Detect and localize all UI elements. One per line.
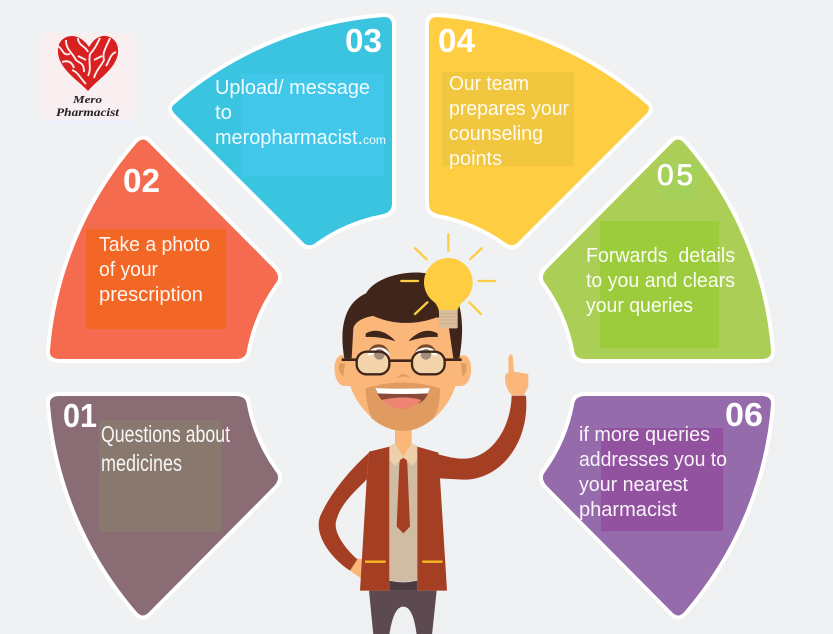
text 05 bbox=[586, 245, 735, 317]
raised arm bbox=[437, 396, 526, 480]
logo: Mero Pharmacist bbox=[42, 33, 133, 125]
text 01 bbox=[101, 421, 230, 476]
logo text: Mero bbox=[72, 94, 103, 106]
text 06: pharmacist bbox=[579, 499, 677, 521]
character: pharmacist with light bulb bbox=[319, 234, 528, 634]
trousers bbox=[369, 591, 437, 634]
text 03: to bbox=[215, 102, 232, 124]
text 06: addresses you to bbox=[579, 449, 727, 471]
panel 04: Our team bbox=[427, 15, 651, 247]
text 01: medicines bbox=[101, 450, 182, 476]
number 02: 02 bbox=[123, 162, 160, 199]
icon: red heart bbox=[58, 36, 118, 91]
number 04: 04 bbox=[438, 22, 476, 59]
text 03: com bbox=[363, 133, 386, 147]
text 05: to you and clears bbox=[586, 270, 735, 292]
text 02: Take a photo bbox=[99, 234, 210, 256]
text 02 bbox=[99, 234, 210, 306]
text 04: points bbox=[449, 148, 502, 170]
ears bbox=[335, 355, 471, 386]
text 03 bbox=[215, 77, 386, 149]
panel 01: Questions about medicines bbox=[48, 394, 280, 618]
text 04: prepares your bbox=[449, 98, 569, 120]
pocket lines bbox=[365, 558, 443, 565]
glasses frame bbox=[342, 352, 462, 374]
text 01: Questions about bbox=[101, 421, 230, 447]
shirt bbox=[389, 446, 417, 582]
light bulb bbox=[424, 258, 473, 328]
text 05: Forwards details bbox=[586, 245, 735, 267]
face bbox=[346, 310, 459, 431]
number 06: 06 bbox=[725, 396, 763, 433]
beard bbox=[366, 382, 440, 431]
panel 06: More queries bbox=[541, 394, 773, 618]
panel 05: Forwards details bbox=[541, 138, 773, 361]
mouth bbox=[375, 388, 430, 407]
text 02: of your bbox=[99, 259, 158, 281]
text 04: Our team bbox=[449, 73, 529, 95]
jacket bbox=[360, 447, 447, 591]
left hand bbox=[350, 558, 365, 580]
text 06: your nearest bbox=[579, 474, 688, 496]
logo text: Pharmacist bbox=[56, 105, 120, 119]
text 04: counseling bbox=[449, 123, 543, 145]
hair bbox=[342, 272, 462, 358]
text 03: Upload/ message bbox=[215, 77, 370, 99]
nose bbox=[396, 374, 411, 378]
eyebrows bbox=[366, 331, 437, 341]
text 06 bbox=[579, 424, 727, 521]
logo text bbox=[56, 94, 120, 119]
tie bbox=[397, 458, 410, 533]
text 05: your queries bbox=[586, 295, 693, 317]
text 03: meropharmacist. bbox=[215, 127, 363, 149]
text 02: prescription bbox=[99, 284, 203, 306]
pointing hand bbox=[505, 354, 528, 395]
text 06: if more queries bbox=[579, 424, 710, 446]
panel 03: Upload bbox=[170, 15, 394, 247]
text 04 bbox=[449, 73, 569, 170]
neck bbox=[395, 427, 412, 460]
collar bbox=[389, 443, 417, 466]
number 01: 01 bbox=[63, 397, 97, 434]
number 03: 03 bbox=[345, 22, 382, 59]
panel 02: Take a photo bbox=[48, 138, 280, 361]
bulb rays bbox=[401, 234, 495, 314]
number 05: 05 bbox=[657, 159, 693, 192]
eyes bbox=[367, 344, 437, 360]
glasses lenses bbox=[357, 352, 445, 374]
lowered arm bbox=[319, 453, 369, 571]
